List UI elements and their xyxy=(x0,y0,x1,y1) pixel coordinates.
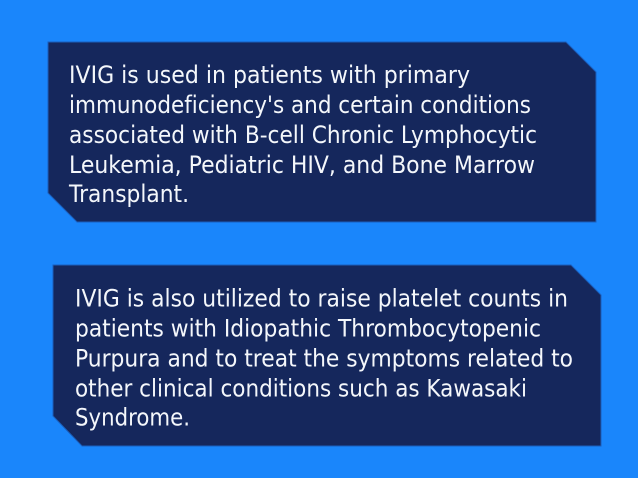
text block: first paragraph: associated with B-cell Chronic Lymphocytic xyxy=(69,121,537,149)
text block: first paragraph: Transplant. xyxy=(68,180,189,208)
text block: first paragraph: Leukemia, Pediatric HIV, and Bone Marrow xyxy=(69,151,535,179)
text block: first paragraph: immunodeficiency's and certain conditions xyxy=(69,91,531,119)
text block: second paragraph: Syndrome. xyxy=(75,404,190,432)
text block: first paragraph: IVIG is used in patients with primary xyxy=(69,61,470,89)
text block: first paragraph xyxy=(68,61,537,208)
panel: primary immunodeficiency uses xyxy=(48,42,596,222)
panel: platelet and Kawasaki uses xyxy=(53,265,601,446)
text block: second paragraph: Purpura and to treat the symptoms related to xyxy=(75,344,573,372)
text block: second paragraph: IVIG is also utilized to raise platelet counts in xyxy=(75,284,568,312)
text block: second paragraph: patients with Idiopathic Thrombocytopenic xyxy=(75,314,541,342)
text block: second paragraph: other clinical conditions such as Kawasaki xyxy=(75,374,527,402)
text block: second paragraph xyxy=(75,284,573,432)
